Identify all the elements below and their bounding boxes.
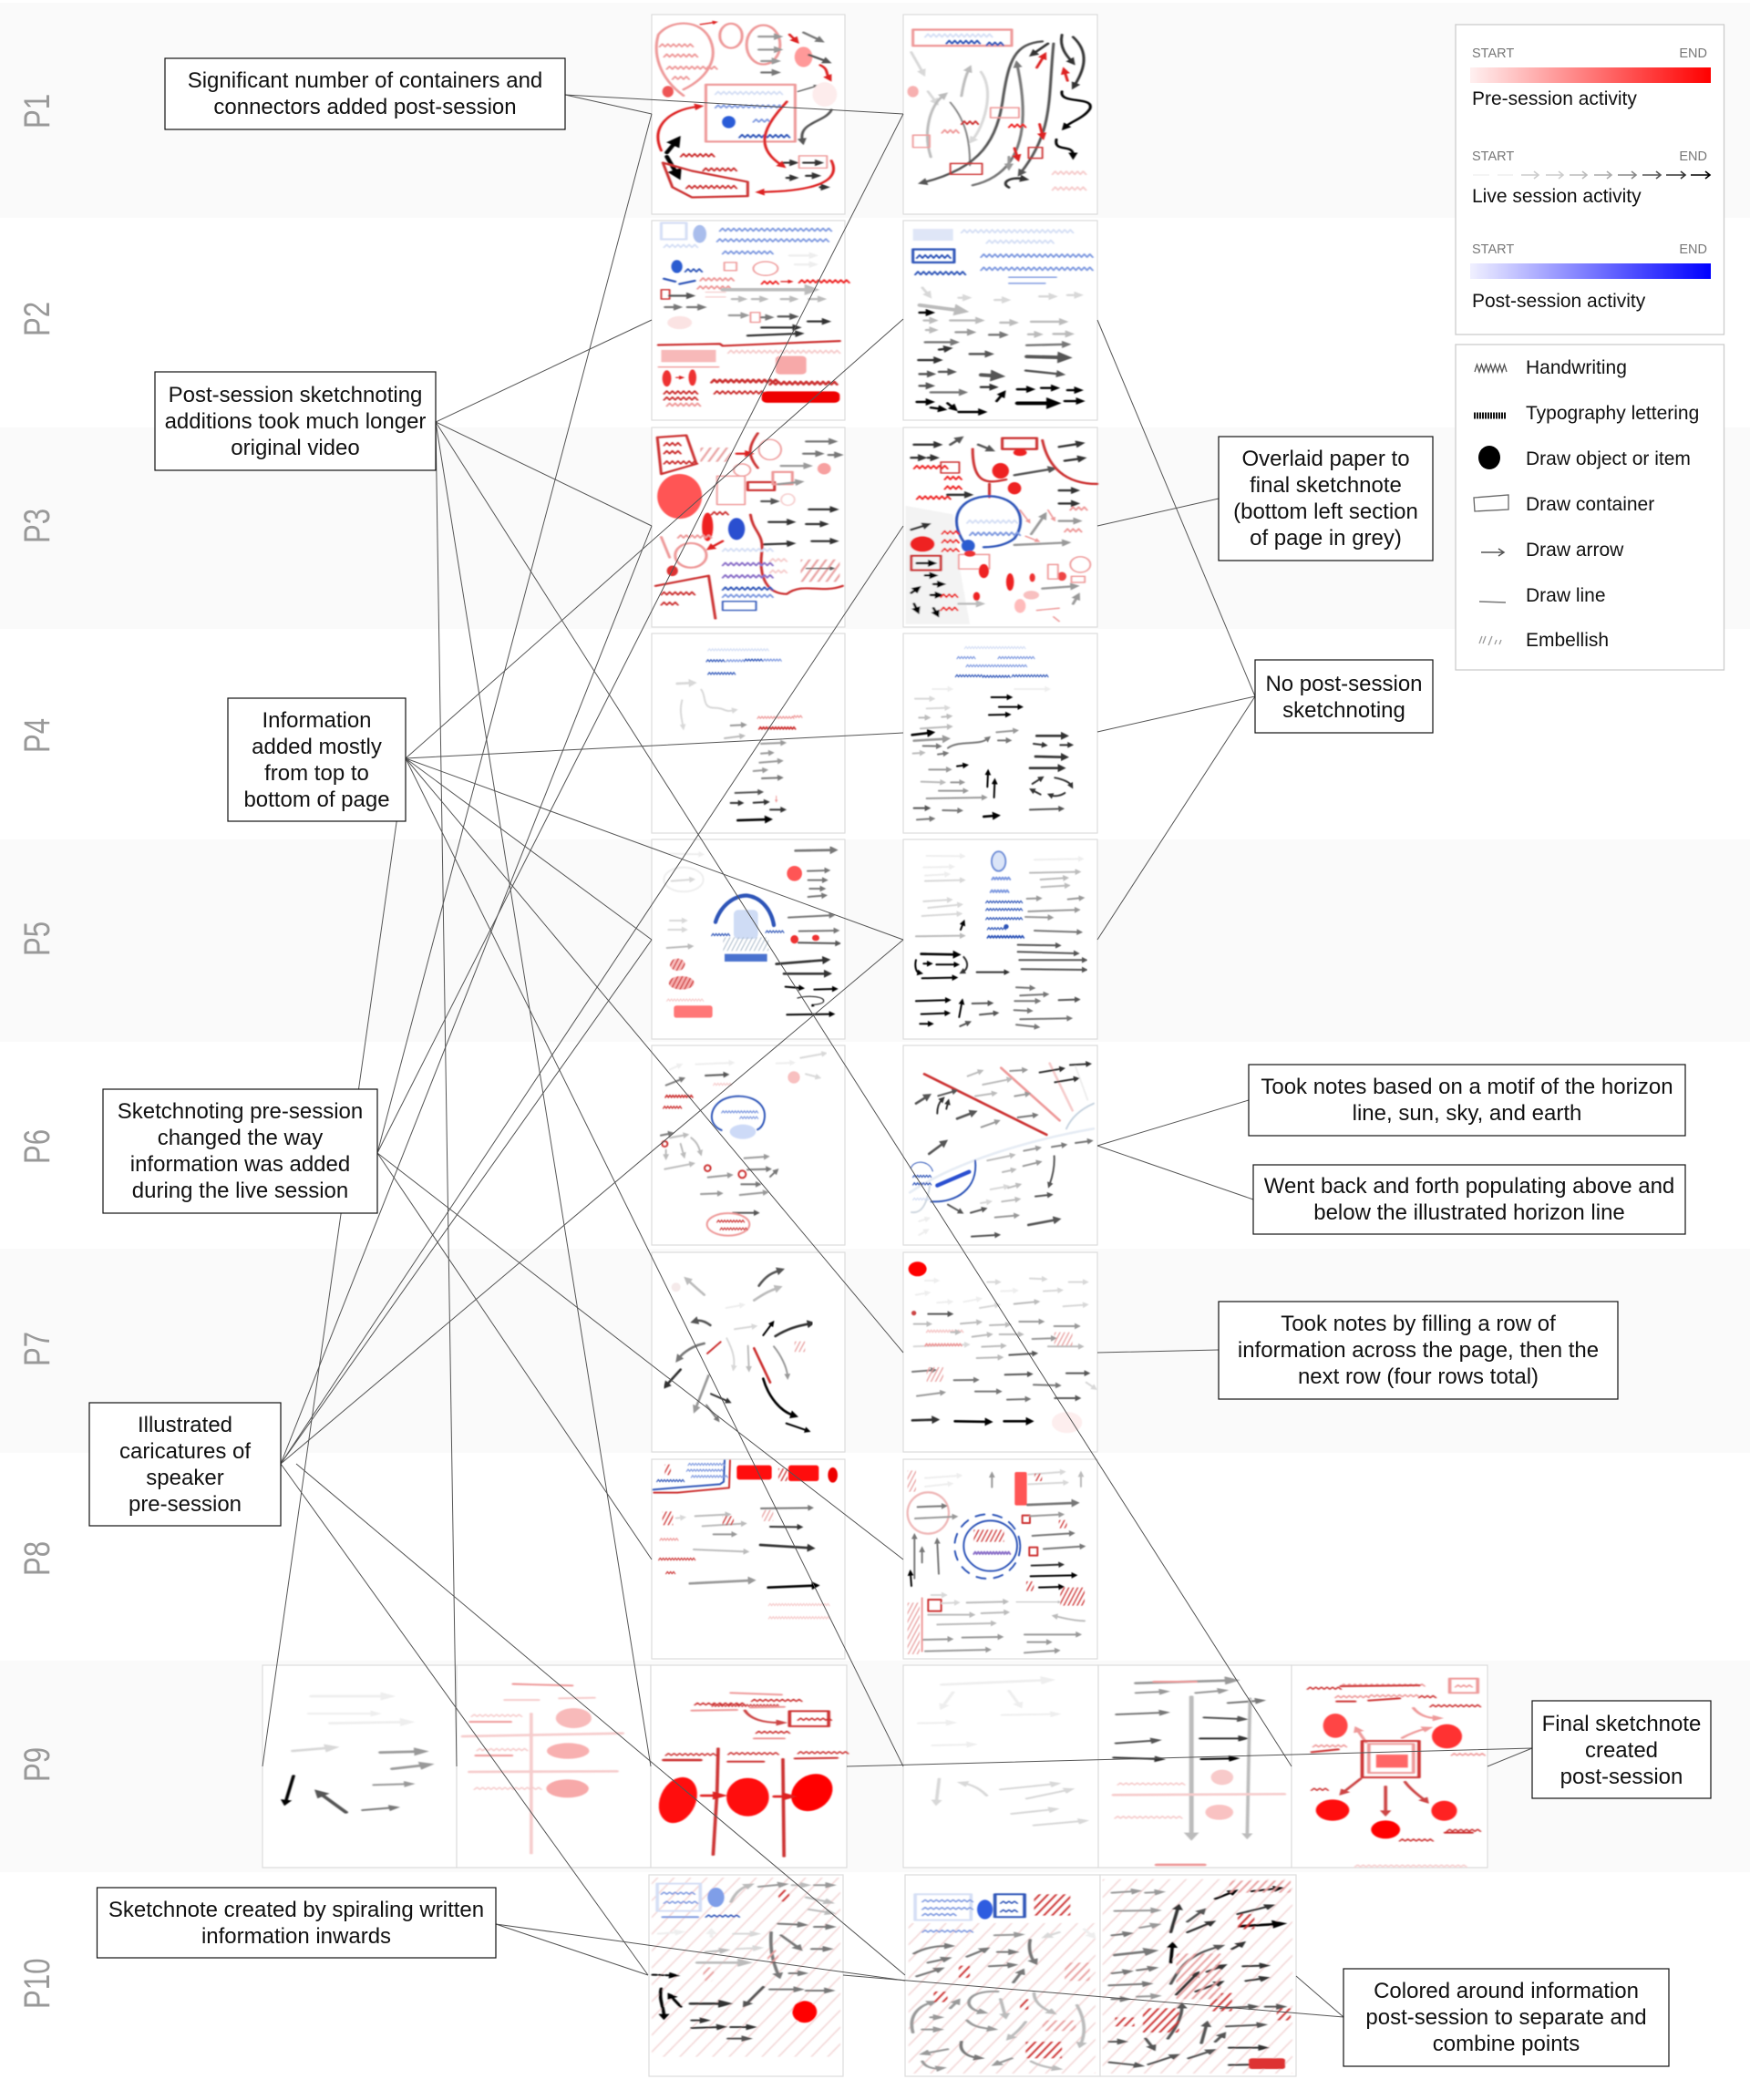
callout: colored around information: post-session to separate and [1365,2005,1647,2030]
legend: activity timing: START [1472,149,1514,164]
legend: activity timing: Pre-session activity [1472,88,1637,109]
callout: spiraling: information inwards [201,1924,391,1949]
P1 pre-session sketch [656,23,837,198]
icon: draw object [1478,446,1500,469]
callout: information added top to bottom: added mostly [252,735,382,759]
P6 pre-session sketch [661,1054,823,1236]
legend: activity timing: START [1472,242,1514,257]
callout: overlaid paper: of page in grey) [1250,526,1402,551]
callout: post-session additions [155,372,436,470]
callout: significant containers: Significant number of containers and [188,68,542,93]
icon: handwriting [1475,365,1507,372]
callout: overlaid paper: Overlaid paper to [1241,447,1410,471]
callout: overlaid paper: final sketchnote [1250,473,1402,498]
callout: colored around information [1343,1969,1669,2066]
callout: final sketchnote [1532,1701,1711,1798]
row labels P1 to P10: P10 [16,1958,57,2009]
callout: back and forth: below the illustrated horizon line [1313,1200,1625,1225]
callout: motif of horizon: Took notes based on a motif of the horizon [1261,1075,1673,1099]
legend: sketch action types [1456,345,1724,670]
legend: activity timing: END [1679,242,1707,257]
panel frames [262,15,1488,2076]
leader lines: caricatures callout [281,526,905,1975]
leader lines: sketchnoting pre-session callout [377,114,903,1560]
callout: colored around information: Colored around information [1374,1979,1639,2003]
callout: filling rows [1219,1302,1618,1399]
callout: no post-session: sketchnoting [1282,698,1405,723]
callout: no post-session: No post-session [1265,672,1423,696]
legend: sketch action types: Typography lettering [1526,403,1699,424]
callout: filling rows: Took notes by filling a row of [1281,1312,1556,1336]
P9 post-session sketch panels [919,1679,1485,1867]
callout: sketchnoting pre-session: changed the way [158,1126,323,1150]
callout: no post-session [1255,660,1433,733]
callout: illustrated caricatures: pre-session [129,1492,242,1517]
callout: post-session additions: Post-session sketchnoting [169,383,422,407]
callout: illustrated caricatures: speaker [146,1466,224,1490]
row labels P1 to P10: P7 [16,1332,57,1366]
row labels P1 to P10: P4 [16,718,57,753]
callout: sketchnoting pre-session: information was added [130,1152,350,1177]
callout: filling rows: next row (four rows total) [1298,1364,1539,1389]
icon: typography lettering [1474,412,1507,419]
P5 post-session sketch [915,851,1084,1027]
callout: information added top to bottom: from top to [264,761,369,786]
P10 pre-session sketch [652,1878,840,2057]
callout: information added top to bottom: bottom of page [243,788,390,812]
legend: activity timing: Post-session activity [1472,291,1646,312]
leader lines: right callouts [1097,320,1255,1353]
P10 post-session sketch panels [909,1879,1292,2074]
legend: sketch action types: Draw line [1526,585,1606,606]
row labels P1 to P10: P6 [16,1129,57,1164]
legend: activity timing: Live session activity [1472,186,1642,207]
legend: sketch action types: Embellish [1526,630,1609,651]
P9 pre-session sketch panels [285,1684,849,1857]
leader lines: significant containers callout [565,95,903,114]
P5 pre-session sketch [664,850,837,1018]
leader lines: top to bottom callout [262,319,903,1766]
callout: illustrated caricatures: caricatures of [119,1439,251,1464]
callout: sketchnoting pre-session: Sketchnoting pre-session [118,1099,363,1124]
callout: colored around information: combine points [1433,2032,1580,2056]
row labels P1 to P10: P3 [16,509,57,543]
P2 post-session sketch [913,229,1093,412]
row labels P1 to P10: P8 [16,1541,57,1576]
P6 post-session sketch with horizon line [910,1064,1094,1237]
icon: draw container [1474,495,1508,511]
callout: motif of horizon [1249,1065,1685,1136]
icon: draw arrow [1481,549,1504,556]
callout: back and forth: Went back and forth populating above and [1264,1174,1674,1199]
legend: sketch action types: Draw container [1526,494,1654,515]
legend: sketch action types: Draw arrow [1526,540,1624,561]
row labels P1 to P10: P5 [16,921,57,956]
callout: final sketchnote: Final sketchnote [1542,1712,1701,1736]
callout: filling rows: information across the page, then the [1238,1338,1599,1363]
callout: motif of horizon: line, sun, sky, and earth [1353,1101,1581,1126]
P8 post-session sketch [908,1470,1085,1654]
callout: spiraling: Sketchnote created by spiraling written [108,1898,484,1922]
callout: illustrated caricatures [89,1403,281,1526]
callout: overlaid paper: (bottom left section [1233,499,1418,524]
callout: post-session additions: additions took much longer [165,409,426,434]
P4 post-session sketch [912,646,1071,819]
leader lines: colored around callout [843,1975,1343,2017]
row labels P1 to P10: P9 [16,1747,57,1782]
legend: sketch action types: Handwriting [1526,357,1627,378]
P3 post-session sketch with grey overlaid paper [906,438,1097,624]
leader lines: final sketchnote callout [847,1748,1532,1766]
P1 post-session sketch [908,30,1090,190]
callout: information added top to bottom [228,698,406,821]
callout: sketchnoting pre-session [103,1089,377,1213]
icon: embellish [1479,636,1501,645]
legend: activity timing: START [1472,46,1514,61]
P7 pre-session sketch [667,1271,809,1430]
callout: post-session additions: original video [231,436,360,460]
P2 pre-session sketch [658,223,849,407]
legend: sketch action types: Draw object or item [1526,448,1691,469]
leader lines: spiraling callout [496,1924,905,1981]
legend: activity timing: END [1679,46,1707,61]
legend: activity timing [1456,25,1724,335]
P3 pre-session sketch [655,433,842,619]
callout: information added top to bottom: Information [262,708,372,733]
callout: illustrated caricatures: Illustrated [138,1413,232,1437]
callout: final sketchnote: created [1585,1738,1658,1763]
callout: final sketchnote: post-session [1560,1765,1683,1789]
callout: back and forth [1253,1165,1685,1234]
row labels P1 to P10 [16,94,57,2009]
callout: significant containers [165,58,565,129]
leader lines: post-session longer callout [436,320,1292,1766]
callout: spiraling [97,1888,496,1958]
row labels P1 to P10: P2 [16,302,57,336]
P8 pre-session sketch [654,1460,838,1619]
callout: significant containers: connectors added post-session [213,95,517,119]
P7 post-session sketch [909,1261,1094,1433]
row labels P1 to P10: P1 [16,94,57,129]
legend: activity timing: END [1679,149,1707,164]
P4 pre-session sketch [677,649,802,820]
callout: sketchnoting pre-session: during the live session [132,1179,348,1203]
callout: overlaid paper [1219,437,1433,561]
